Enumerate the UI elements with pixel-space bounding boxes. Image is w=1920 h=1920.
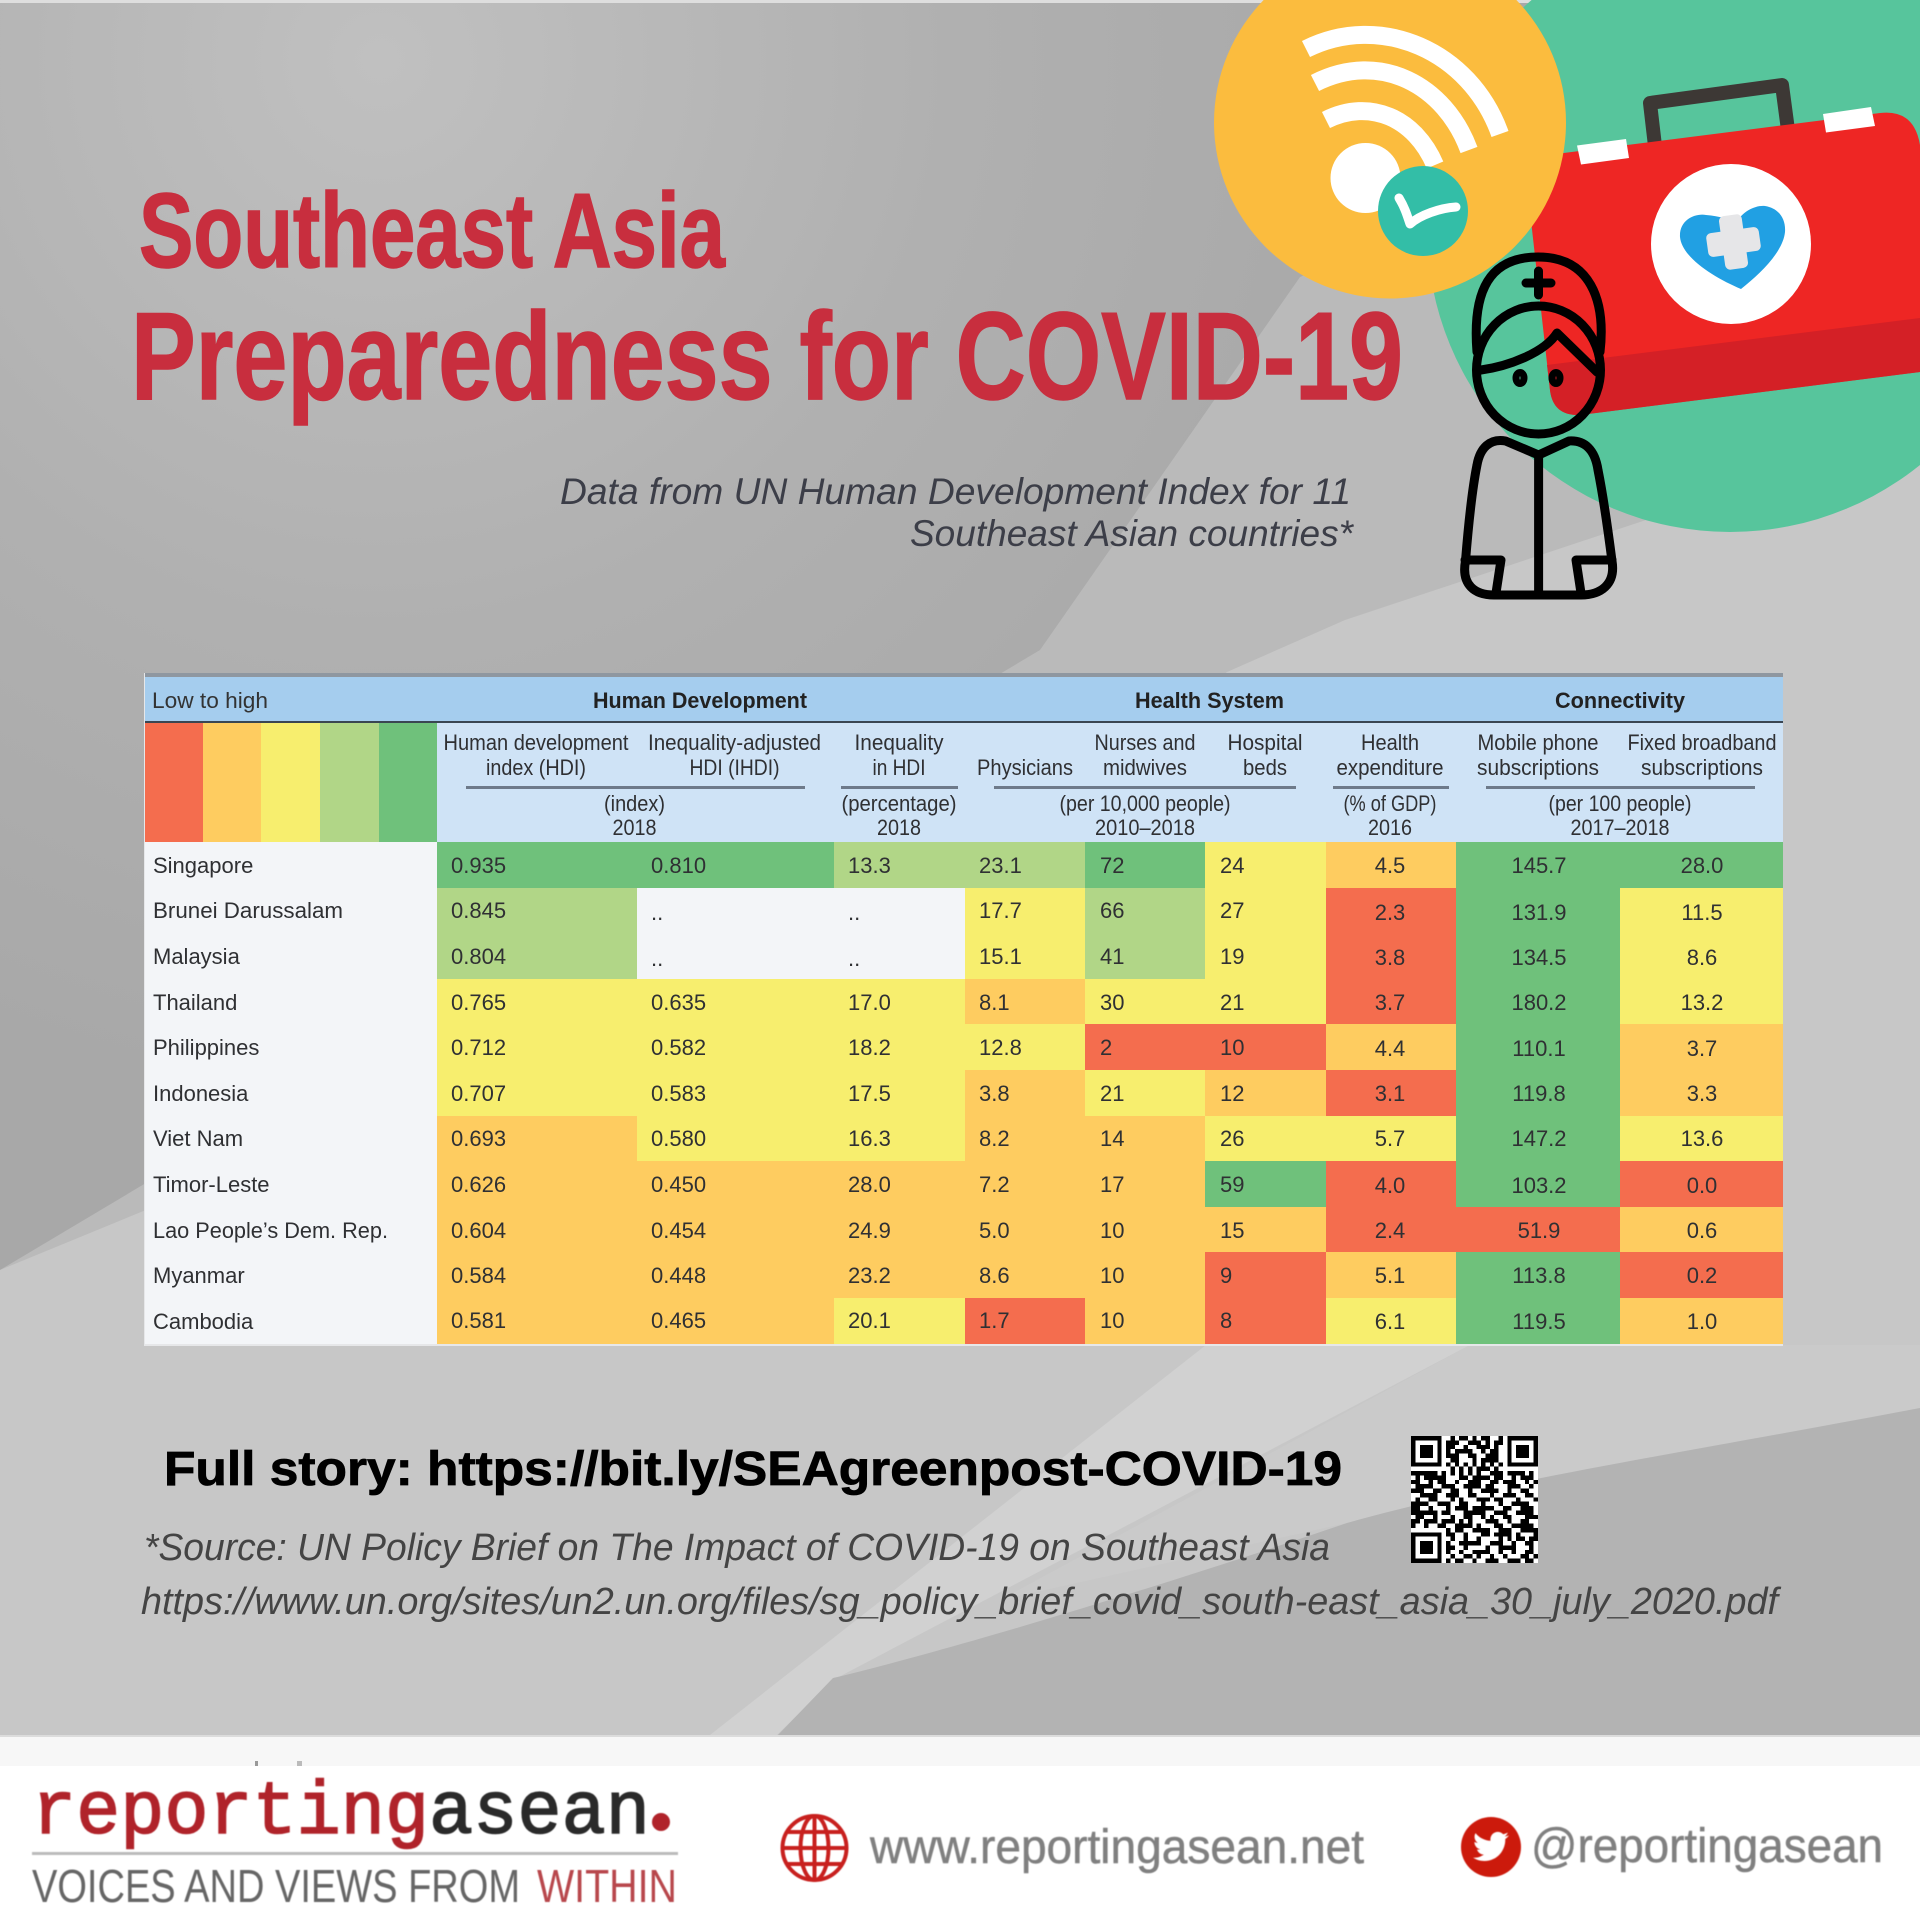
row: Philippines: 12.8: [979, 1035, 1022, 1060]
row: Viet Nam: 8.2: [979, 1126, 1010, 1151]
title: [131, 172, 1403, 426]
row: Myanmar: [145, 1252, 1783, 1298]
column headers: (% of GDP): [1344, 791, 1436, 816]
row: Malaysia: [145, 933, 1783, 979]
row: Timor-Leste: 59: [1220, 1172, 1244, 1197]
source note: *Source: UN Policy Brief on The Impact of COVID-19 on Southeast Asia: [144, 1527, 1330, 1569]
row: Cambodia: 8: [1220, 1308, 1232, 1333]
row: Timor-Leste: [145, 1161, 1783, 1207]
row: Brunei Darussalam: 27: [1220, 898, 1244, 923]
row: Malaysia: 134.5: [1511, 945, 1567, 970]
row: Malaysia: 41: [1100, 944, 1124, 969]
row: Myanmar: 113.8: [1512, 1263, 1566, 1288]
row: Indonesia: 0.707: [451, 1081, 506, 1106]
column headers: midwives: [1103, 755, 1187, 780]
row: Brunei Darussalam: 0.845: [451, 898, 506, 923]
row: Timor-Leste: 4.0: [1375, 1173, 1405, 1198]
row: Indonesia: [145, 1070, 1783, 1116]
QR code: [1411, 1436, 1538, 1563]
column headers: Fixed broadband: [1628, 730, 1776, 755]
row: Viet Nam: 26: [1220, 1126, 1244, 1151]
row: Singapore: 23.1: [979, 853, 1022, 878]
column headers: Physicians: [977, 755, 1073, 780]
row: Malaysia: ..: [848, 946, 860, 971]
icon: twitter: [1461, 1817, 1521, 1877]
column headers: Health: [1361, 730, 1419, 755]
row: Philippines: 10: [1220, 1035, 1244, 1060]
row: Malaysia: 8.6: [1687, 945, 1717, 970]
row: Philippines: 4.4: [1375, 1036, 1405, 1061]
row: Malaysia: 3.8: [1375, 945, 1405, 970]
row: Thailand: 3.7: [1375, 990, 1405, 1015]
column headers: Nurses and: [1094, 730, 1196, 755]
row: Philippines: 3.7: [1687, 1036, 1717, 1061]
row: Thailand: 0.765: [451, 990, 506, 1015]
row: Singapore: 0.810: [651, 853, 706, 878]
row: Lao People's Dem. Rep.: 51.9: [1518, 1218, 1560, 1243]
row: Philippines: 0.582: [651, 1035, 706, 1060]
row: Cambodia: Cambodia: [153, 1309, 254, 1334]
row: Cambodia: 0.465: [651, 1308, 706, 1333]
column headers: Mobile phone: [1478, 730, 1598, 755]
icon: globe: [782, 1816, 846, 1880]
row: Philippines: 2: [1100, 1035, 1112, 1060]
column headers: 2017–2018: [1570, 815, 1670, 840]
legend: low to high colour scale: [145, 723, 437, 842]
row: Lao People's Dem. Rep.: 0.454: [651, 1218, 706, 1243]
row: Myanmar: 5.1: [1375, 1263, 1405, 1288]
row: Myanmar: 23.2: [848, 1263, 891, 1288]
table group header band: Connectivity: [1555, 688, 1686, 713]
row: Cambodia: [145, 1298, 1783, 1344]
row: Timor-Leste: 0.450: [651, 1172, 706, 1197]
icon: nurse: [1465, 257, 1613, 595]
row: Brunei Darussalam: 11.5: [1681, 900, 1723, 925]
row: Indonesia: 3.3: [1687, 1081, 1717, 1106]
table group header band: Low to high: [152, 688, 268, 713]
row: Malaysia: 19: [1220, 944, 1244, 969]
column headers: expenditure: [1336, 755, 1444, 780]
row: Thailand: 13.2: [1681, 990, 1723, 1015]
row: Singapore: 145.7: [1511, 853, 1567, 878]
row: Thailand: [145, 979, 1783, 1025]
row: Cambodia: 20.1: [848, 1308, 891, 1333]
row: Viet Nam: 14: [1100, 1126, 1124, 1151]
row: Philippines: 18.2: [848, 1035, 891, 1060]
row: Viet Nam: [145, 1116, 1783, 1162]
row: Lao People's Dem. Rep.: 0.6: [1687, 1218, 1717, 1243]
row: Cambodia: 0.581: [451, 1308, 506, 1333]
row: Myanmar: 0.448: [651, 1263, 706, 1288]
row: Thailand: Thailand: [153, 990, 237, 1015]
column headers: (index): [604, 791, 665, 816]
column headers: subscriptions: [1477, 755, 1599, 780]
table group header band: Human Development: [593, 688, 808, 713]
logo: reportingasean: WITHIN: [537, 1860, 677, 1912]
logo: reportingasean: reporting: [32, 1771, 429, 1856]
row: Malaysia: ..: [651, 946, 663, 971]
data table: [144, 673, 1783, 1346]
row: Singapore: 28.0: [1681, 853, 1723, 878]
row: Indonesia: 3.8: [979, 1081, 1010, 1106]
column headers: index (HDI): [486, 755, 586, 780]
row: Myanmar: Myanmar: [153, 1263, 245, 1288]
row: Philippines: [145, 1024, 1783, 1070]
table group header band: Health System: [1135, 688, 1284, 713]
twitter handle: @reportingasean: [1531, 1820, 1883, 1873]
icon: wifi signal: [1214, 0, 1566, 298]
row: Indonesia: 17.5: [848, 1081, 891, 1106]
row: Brunei Darussalam: [145, 888, 1783, 934]
row: Malaysia: 15.1: [979, 944, 1022, 969]
icon: first aid case: [1524, 85, 1920, 415]
row: Singapore: [145, 842, 1783, 888]
row: Brunei Darussalam: ..: [848, 900, 860, 925]
subtitle: [560, 471, 1355, 554]
row: Myanmar: 0.584: [451, 1263, 506, 1288]
table group header band: [145, 677, 1783, 723]
row: Brunei Darussalam: 17.7: [979, 898, 1022, 923]
title: Southeast Asia: [139, 172, 726, 290]
column headers: 2018: [877, 815, 921, 840]
row: Singapore: 13.3: [848, 853, 891, 878]
column headers: 2010–2018: [1095, 815, 1195, 840]
row: Philippines: Philippines: [153, 1035, 259, 1060]
row: Timor-Leste: 7.2: [979, 1172, 1010, 1197]
logo: reportingasean: VOICES AND VIEWS FROM: [32, 1860, 520, 1912]
row: Viet Nam: 147.2: [1511, 1126, 1567, 1151]
row: Singapore: Singapore: [153, 853, 253, 878]
row: Brunei Darussalam: Brunei Darussalam: [153, 898, 343, 923]
row: Lao People's Dem. Rep.: [145, 1207, 1783, 1253]
row: Viet Nam: 13.6: [1681, 1126, 1723, 1151]
row: Lao People's Dem. Rep.: 2.4: [1375, 1218, 1405, 1243]
column headers: [437, 723, 1783, 842]
row: Malaysia: Malaysia: [153, 944, 241, 969]
row: Myanmar: 9: [1220, 1263, 1232, 1288]
row: Brunei Darussalam: ..: [651, 900, 663, 925]
row: Singapore: 24: [1220, 853, 1244, 878]
row: Timor-Leste: 0.626: [451, 1172, 506, 1197]
column headers: (per 100 people): [1548, 791, 1692, 816]
column headers: Hospital: [1228, 730, 1302, 755]
row: Cambodia: 119.5: [1512, 1309, 1566, 1334]
logo: reportingasean: asean: [429, 1771, 650, 1856]
row: Viet Nam: 16.3: [848, 1126, 891, 1151]
row: Singapore: 0.935: [451, 853, 506, 878]
source url: https://www.un.org/sites/un2.un.org/files/sg_policy_brief_covid_south-east_asia_30_july_2020.pdf: [141, 1581, 1781, 1623]
row: Viet Nam: 0.693: [451, 1126, 506, 1151]
row: Malaysia: 0.804: [451, 944, 506, 969]
row: Myanmar: 10: [1100, 1263, 1124, 1288]
column headers: Inequality-adjusted: [648, 730, 821, 755]
row: Timor-Leste: 28.0: [848, 1172, 891, 1197]
row: Philippines: 110.1: [1512, 1036, 1566, 1061]
column headers: subscriptions: [1641, 755, 1763, 780]
row: Indonesia: Indonesia: [153, 1081, 249, 1106]
row: Thailand: 8.1: [979, 990, 1010, 1015]
title: Preparedness for COVID-19: [131, 288, 1403, 426]
row: Lao People's Dem. Rep.: 24.9: [848, 1218, 891, 1243]
row: Indonesia: 119.8: [1512, 1081, 1566, 1106]
row: Thailand: 0.635: [651, 990, 706, 1015]
column headers: (per 10,000 people): [1060, 791, 1230, 816]
row: Brunei Darussalam: 131.9: [1511, 900, 1567, 925]
row: Cambodia: 1.0: [1687, 1309, 1717, 1334]
footer band: [0, 1735, 1920, 1920]
row: Thailand: 21: [1220, 990, 1244, 1015]
subtitle: Southeast Asian countries*: [910, 513, 1355, 554]
column headers: Inequality: [854, 730, 944, 755]
column headers: beds: [1243, 755, 1287, 780]
row: Cambodia: 1.7: [979, 1308, 1010, 1333]
row: Indonesia: 3.1: [1375, 1081, 1405, 1106]
row: Timor-Leste: 103.2: [1511, 1173, 1567, 1198]
website: www.reportingasean.net: [869, 1821, 1364, 1874]
row: Philippines: 0.712: [451, 1035, 506, 1060]
column headers: 2016: [1368, 815, 1412, 840]
column headers: 2018: [612, 815, 656, 840]
column headers: in HDI: [872, 755, 926, 780]
subtitle: Data from UN Human Development Index for 11: [560, 471, 1351, 512]
column headers: HDI (IHDI): [690, 755, 780, 780]
row: Timor-Leste: 0.0: [1687, 1173, 1717, 1198]
illustration: green circle: [1427, 0, 1920, 532]
row: Thailand: 17.0: [848, 990, 891, 1015]
column headers: Human development: [444, 730, 628, 755]
row: Cambodia: 6.1: [1375, 1309, 1405, 1334]
full story link: Full story: https://bit.ly/SEAgreenpost-COVID-19: [164, 1443, 1342, 1496]
row: Indonesia: 21: [1100, 1081, 1124, 1106]
row: Lao People's Dem. Rep.: 10: [1100, 1218, 1124, 1243]
row: Indonesia: 12: [1220, 1081, 1244, 1106]
row: Viet Nam: Viet Nam: [153, 1126, 243, 1151]
row: Brunei Darussalam: 2.3: [1375, 900, 1405, 925]
row: Timor-Leste: Timor-Leste: [153, 1172, 270, 1197]
row: Indonesia: 0.583: [651, 1081, 706, 1106]
row: Thailand: 180.2: [1511, 990, 1567, 1015]
row: Singapore: 4.5: [1375, 853, 1405, 878]
row: Viet Nam: 0.580: [651, 1126, 706, 1151]
row: Myanmar: 0.2: [1687, 1263, 1717, 1288]
logo: reportingasean: [32, 1771, 678, 1912]
row: Singapore: 72: [1100, 853, 1124, 878]
row: Viet Nam: 5.7: [1375, 1126, 1405, 1151]
row: Cambodia: 10: [1100, 1308, 1124, 1333]
row: Lao People's Dem. Rep.: Lao People’s Dem. Rep.: [153, 1218, 388, 1243]
row: Brunei Darussalam: 66: [1100, 898, 1124, 923]
row: Thailand: 30: [1100, 990, 1124, 1015]
row: Lao People's Dem. Rep.: 15: [1220, 1218, 1244, 1243]
row: Lao People's Dem. Rep.: 5.0: [979, 1218, 1010, 1243]
row: Lao People's Dem. Rep.: 0.604: [451, 1218, 506, 1243]
row: Myanmar: 8.6: [979, 1263, 1010, 1288]
row: Timor-Leste: 17: [1100, 1172, 1124, 1197]
column headers: (percentage): [842, 791, 956, 816]
